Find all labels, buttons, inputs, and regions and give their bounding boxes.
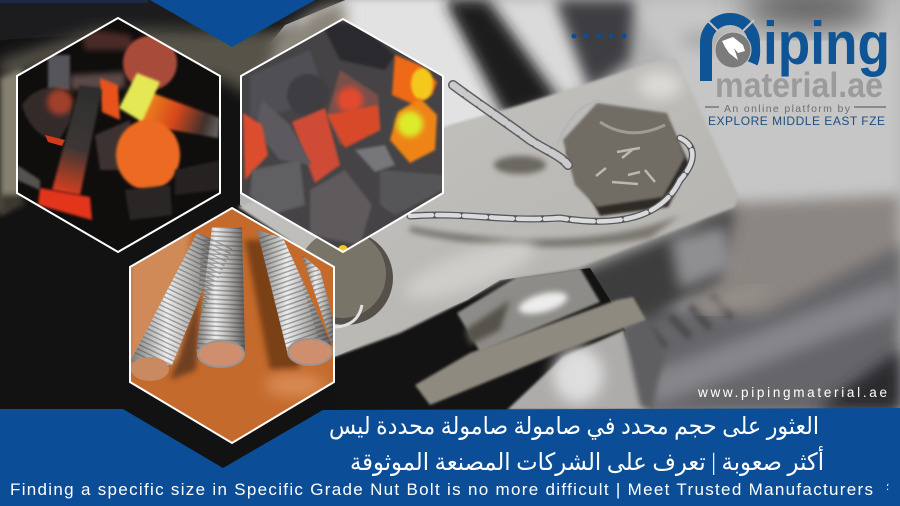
logo: company name: EXPLORE MIDDLE EAST FZE xyxy=(708,114,885,128)
hexagon photo: hot bolts pile xyxy=(239,17,445,255)
steel plate xyxy=(238,58,738,357)
website address: www.pipingmaterial.ae xyxy=(697,385,887,400)
top blue chevron xyxy=(150,0,315,47)
bottom blue banner xyxy=(0,408,900,506)
logo xyxy=(705,10,890,128)
pipe fitting below plate xyxy=(334,268,665,412)
logo: tagline: An online platform by xyxy=(724,103,851,115)
Arabic headline line 1: العثور على حجم محدد في صامولة صامولة محددة ليس xyxy=(329,414,819,440)
top-left photo strip xyxy=(0,0,148,3)
hexagon photo: glowing bolts xyxy=(15,15,222,255)
logo: P ring mark xyxy=(706,19,754,81)
twisted lock wire xyxy=(410,85,692,221)
bolt head with markings xyxy=(563,103,690,216)
English caption: Finding a specific size in Specific Grade Nut Bolt is no more difficult | Meet Trusted Manufacturers xyxy=(10,480,873,499)
small cut-off mark: ؛ xyxy=(886,482,889,493)
logo: material.ae: material.ae xyxy=(715,66,883,105)
Arabic headline line 2: أكثر صعوبة | تعرف على الشركات المصنعة الموثوقة xyxy=(350,446,824,476)
hexagon photo: threaded stud bolts xyxy=(128,206,336,446)
plate surface shading xyxy=(398,71,682,311)
decorative dots xyxy=(572,34,626,38)
lower-left bolt head xyxy=(298,230,393,327)
